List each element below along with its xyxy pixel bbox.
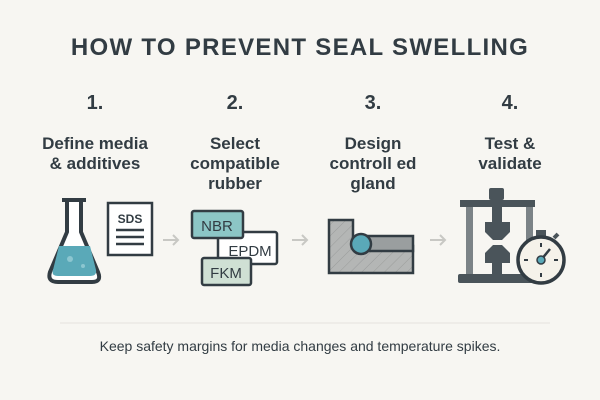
title: HOW TO PREVENT SEAL SWELLING (71, 34, 529, 61)
step 3 heading (330, 92, 416, 193)
arrow 3 (430, 235, 445, 245)
step 2 heading: Select (210, 134, 260, 153)
icon: rubber material tags (192, 211, 277, 285)
icon: stopwatch (518, 230, 564, 283)
icon: test press (458, 188, 536, 283)
footer note: Keep safety margins for media changes and temperature spikes. (100, 338, 500, 354)
icon: SDS document: SDS (118, 212, 142, 226)
step 1 heading: & additives (50, 154, 140, 173)
icon: SDS document (108, 203, 152, 255)
arrow 1 (163, 235, 178, 245)
step 1 heading (42, 92, 148, 173)
icon: gland cross-section (329, 220, 413, 273)
step 2 heading: compatible (190, 154, 280, 173)
step 4 heading: Test & (485, 134, 535, 153)
step 3 heading: gland (350, 174, 396, 193)
step 4 heading (478, 92, 542, 173)
step 3 heading: controll ed (330, 154, 416, 173)
step 2 heading: rubber (208, 174, 262, 193)
step 3 heading: Design (345, 134, 401, 153)
step 3 heading: 3. (365, 92, 381, 114)
step 4 heading: 4. (502, 92, 518, 114)
step 1 heading: Define media (42, 134, 148, 153)
step 4 heading: validate (478, 154, 542, 173)
icon: flask (49, 200, 99, 282)
icon: rubber material tags: FKM (210, 265, 242, 282)
arrow 2 (292, 235, 307, 245)
icon: rubber material tags: NBR (201, 218, 233, 235)
step 2 heading: 2. (227, 92, 243, 114)
step 2 heading (190, 92, 280, 193)
icon: rubber material tags: EPDM (228, 243, 272, 260)
step 1 heading: 1. (87, 92, 103, 114)
